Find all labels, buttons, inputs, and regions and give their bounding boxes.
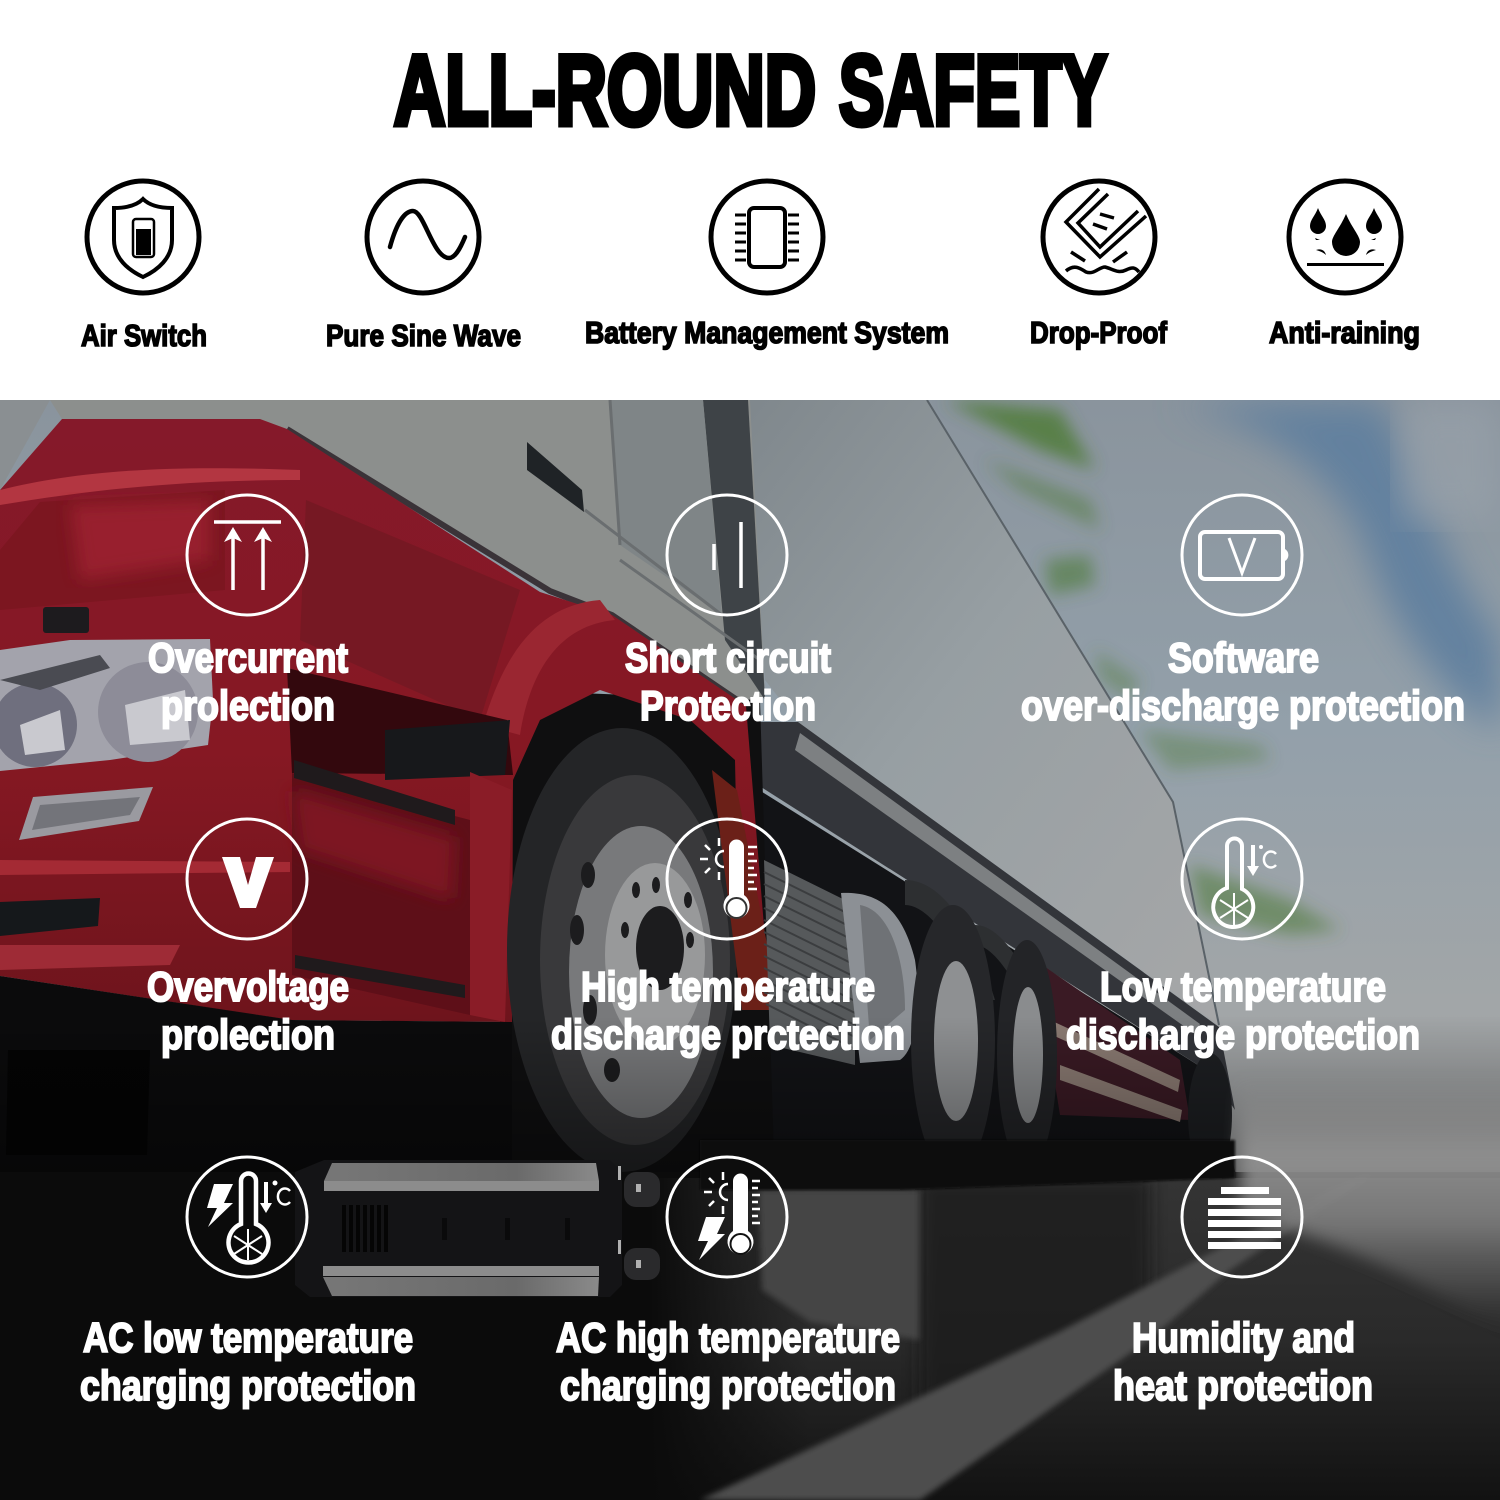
label: Overcurrent bbox=[148, 634, 348, 681]
icon: cold thermometer bbox=[1182, 819, 1302, 939]
under bumper dark bbox=[0, 976, 512, 1190]
rear wheel arches bbox=[905, 880, 1013, 1000]
icon: hot thermometer bbox=[667, 819, 787, 939]
icon: shield with battery bbox=[87, 181, 199, 293]
feature: High temperature discharge protection bbox=[551, 819, 905, 1058]
icon: chip bbox=[711, 181, 823, 293]
fender highlight bbox=[483, 600, 615, 735]
fog lamp bbox=[19, 787, 153, 840]
rear red guard behind wheel bbox=[712, 770, 775, 1010]
feature: Software over-discharge protection bbox=[1021, 495, 1465, 729]
rear rims bbox=[934, 961, 978, 1121]
feature: Overvoltage protection bbox=[147, 819, 349, 1058]
rear tyres bbox=[911, 905, 995, 1140]
label: AC high temperature bbox=[556, 1314, 900, 1361]
dark wheel-well bbox=[500, 690, 775, 1190]
label: Battery Management System bbox=[585, 315, 949, 350]
feature: Overvoltage protection: prolection bbox=[161, 1011, 335, 1058]
trailer corner seam bbox=[927, 400, 1219, 1025]
cab door pillar and window bbox=[703, 400, 765, 700]
feature: Air Switch bbox=[81, 181, 207, 353]
feature: Overcurrent protection: prolection bbox=[161, 682, 335, 729]
white road stripe bbox=[702, 1221, 1292, 1500]
feature: Humidity and heat protection bbox=[1113, 1157, 1373, 1409]
label: Overvoltage bbox=[147, 963, 349, 1010]
title: ALL-ROUND bbox=[394, 34, 816, 146]
feature: Low temperature discharge protection bbox=[1066, 819, 1420, 1058]
black tag above headlight bbox=[43, 607, 89, 633]
truck shadow on road bbox=[921, 1182, 1152, 1376]
background photo: truck on road bbox=[0, 400, 1500, 1500]
tyres bottom in shadow bbox=[700, 1140, 1235, 1190]
feature: Overcurrent protection bbox=[148, 495, 348, 729]
road surface bbox=[650, 1178, 1500, 1500]
icon: short circuit bbox=[667, 495, 787, 615]
mudguard bbox=[292, 773, 470, 1015]
panel seams bbox=[442, 1218, 570, 1240]
trailer lower rail bbox=[745, 722, 1235, 1110]
icon: bolt and cold thermometer bbox=[187, 1157, 307, 1277]
white header background bbox=[0, 0, 1500, 400]
inverter product bbox=[295, 1160, 660, 1297]
icon: bolt and hot thermometer bbox=[667, 1157, 787, 1277]
bumper black strip bbox=[0, 898, 100, 936]
red bumper highlights bbox=[0, 860, 290, 875]
label: Air Switch bbox=[81, 318, 207, 353]
icon: falling device over water bbox=[1043, 181, 1155, 293]
sky and blurred trees bbox=[945, 400, 1500, 935]
door panel bbox=[300, 500, 520, 720]
right fog over road bbox=[1230, 1104, 1500, 1314]
icon: stacked bars bbox=[1182, 1157, 1302, 1277]
cab silver upper bbox=[50, 400, 765, 706]
red cab body bbox=[0, 419, 770, 1022]
trailer side bbox=[750, 400, 1198, 928]
mudguard rubber strips bbox=[294, 760, 465, 998]
upper red highlight bands bbox=[0, 468, 300, 505]
feature: Anti-raining bbox=[1269, 181, 1420, 350]
label: AC low temperature bbox=[83, 1314, 413, 1361]
front tyre bbox=[507, 728, 737, 1172]
feature: AC high temperature charging protection bbox=[556, 1157, 900, 1409]
terminals bbox=[624, 1172, 660, 1280]
icon: sine wave bbox=[367, 181, 479, 293]
feature: High temperature discharge protection: discharge prctection bbox=[551, 1011, 905, 1058]
feature: Drop-Proof bbox=[1030, 181, 1168, 350]
label: Drop-Proof bbox=[1030, 315, 1168, 350]
label: Software bbox=[1168, 634, 1319, 681]
label: Anti-raining bbox=[1269, 315, 1420, 350]
feature: AC low temperature charging protection bbox=[80, 1157, 416, 1409]
icon: overcurrent arrows bbox=[187, 495, 307, 615]
label: Humidity and bbox=[1132, 1314, 1355, 1361]
far rear tyres bbox=[1188, 1054, 1232, 1142]
feature: Short circuit protection: Protection bbox=[640, 682, 816, 729]
icon: bold V bbox=[187, 819, 307, 939]
feature: Humidity and heat protection: heat protection bbox=[1113, 1362, 1373, 1409]
label: Pure Sine Wave bbox=[326, 318, 521, 353]
dark wheel-well recess bbox=[287, 668, 513, 775]
inverter body bbox=[295, 1160, 622, 1297]
label: Low temperature bbox=[1100, 963, 1386, 1010]
feature: Low temperature discharge protection: discharge protection bbox=[1066, 1011, 1420, 1058]
icon: water drops on surface bbox=[1289, 181, 1401, 293]
bottom metal strip bbox=[323, 1266, 599, 1276]
front rim bbox=[569, 826, 713, 1118]
feature: Battery Management System bbox=[585, 181, 949, 350]
headlight bbox=[0, 639, 213, 771]
vent grille bbox=[342, 1205, 388, 1252]
undercarriage dark bbox=[762, 792, 1236, 1172]
label: Short circuit bbox=[625, 634, 831, 681]
feature: AC low temperature charging protection: charging protection bbox=[80, 1362, 416, 1409]
road base bbox=[0, 1172, 1259, 1500]
top metal strip bbox=[324, 1163, 599, 1181]
feature: AC high temperature charging protection: charging protection bbox=[560, 1362, 896, 1409]
label: High temperature bbox=[581, 963, 875, 1010]
reflection box on road bbox=[759, 1190, 919, 1340]
radiator bbox=[764, 860, 855, 1065]
feature: Short circuit protection bbox=[625, 495, 831, 729]
icon: battery V bbox=[1182, 495, 1302, 615]
maroon frame and bars bbox=[1046, 968, 1188, 1120]
feature: Pure Sine Wave bbox=[326, 181, 521, 353]
fuel tank bbox=[841, 893, 918, 1063]
photo shade bbox=[538, 1035, 1500, 1172]
title: SAFETY bbox=[839, 34, 1107, 146]
